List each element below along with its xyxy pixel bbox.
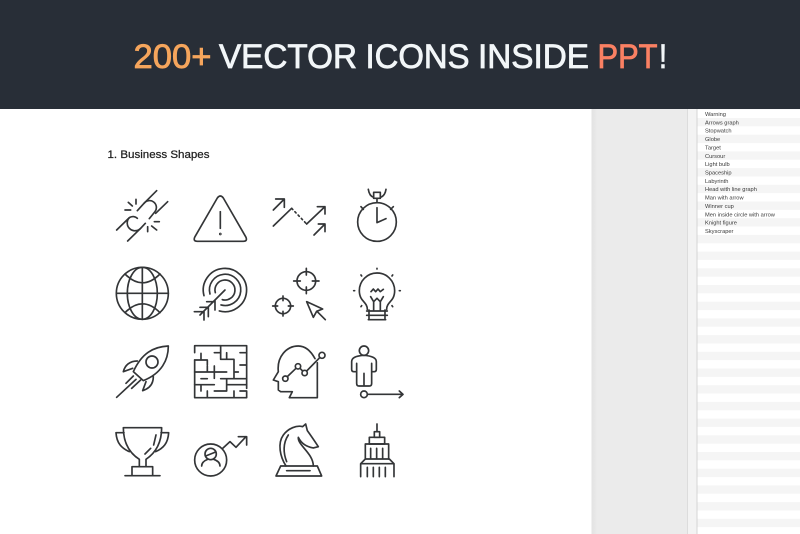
panel: icon name table: Head with line graph bbox=[705, 187, 757, 193]
header band bbox=[0, 0, 800, 109]
panel: icon name table: Warning bbox=[705, 112, 726, 118]
panel: icon name table: Spaceship bbox=[705, 170, 732, 176]
icon: warning triangle bbox=[194, 196, 246, 241]
icon: arrows graph bbox=[273, 199, 325, 235]
panel: icon name table: Skyscraper bbox=[705, 229, 734, 235]
icon: man inside circle with arrow bbox=[195, 437, 247, 476]
section heading: 1. Business Shapes bbox=[108, 149, 210, 161]
title: ICONS bbox=[366, 38, 470, 76]
icon: knight figure bbox=[276, 424, 322, 476]
panel: icon name table: Man with arrow bbox=[705, 196, 744, 202]
title: PPT bbox=[598, 38, 658, 76]
icon: rocket bbox=[117, 346, 168, 397]
icon: head with line graph bbox=[273, 346, 325, 398]
icon: man with arrow bbox=[352, 346, 403, 398]
icon: light bulb bbox=[354, 268, 400, 320]
panel: grey sidebar bbox=[592, 109, 698, 534]
panel: icon name table: Stopwatch bbox=[705, 129, 732, 135]
icon: globe bbox=[116, 267, 168, 319]
panel: icon name table: Light bulb bbox=[705, 162, 730, 168]
icon: skyscraper bbox=[361, 424, 394, 477]
icon: target with arrow bbox=[194, 268, 247, 320]
icon: crosshairs and cursor bbox=[273, 268, 325, 320]
icon: winner cup bbox=[116, 428, 169, 476]
panel: icon name table: Winner cup bbox=[705, 204, 734, 210]
icon: stopwatch bbox=[358, 189, 396, 241]
title: VECTOR bbox=[219, 38, 357, 76]
panel: icon name table: Labyrinth bbox=[705, 179, 728, 185]
title bbox=[134, 38, 667, 76]
title: ! bbox=[659, 38, 667, 76]
title: INSIDE bbox=[478, 38, 589, 76]
icon: broken chain bbox=[117, 191, 168, 241]
panel: icon name table: Arrows graph bbox=[705, 120, 739, 126]
icon: labyrinth bbox=[195, 346, 247, 398]
panel: icon name table: Knight figure bbox=[705, 221, 737, 227]
panel: icon name table bbox=[698, 109, 800, 534]
panel: icon name table: Cursour bbox=[705, 154, 725, 160]
title: 200+ bbox=[134, 38, 212, 76]
panel: icon name table: Men inside circle with arrow bbox=[705, 212, 776, 218]
panel: icon name table: Target bbox=[705, 145, 721, 151]
panel: icon name table: Globe bbox=[705, 137, 720, 143]
